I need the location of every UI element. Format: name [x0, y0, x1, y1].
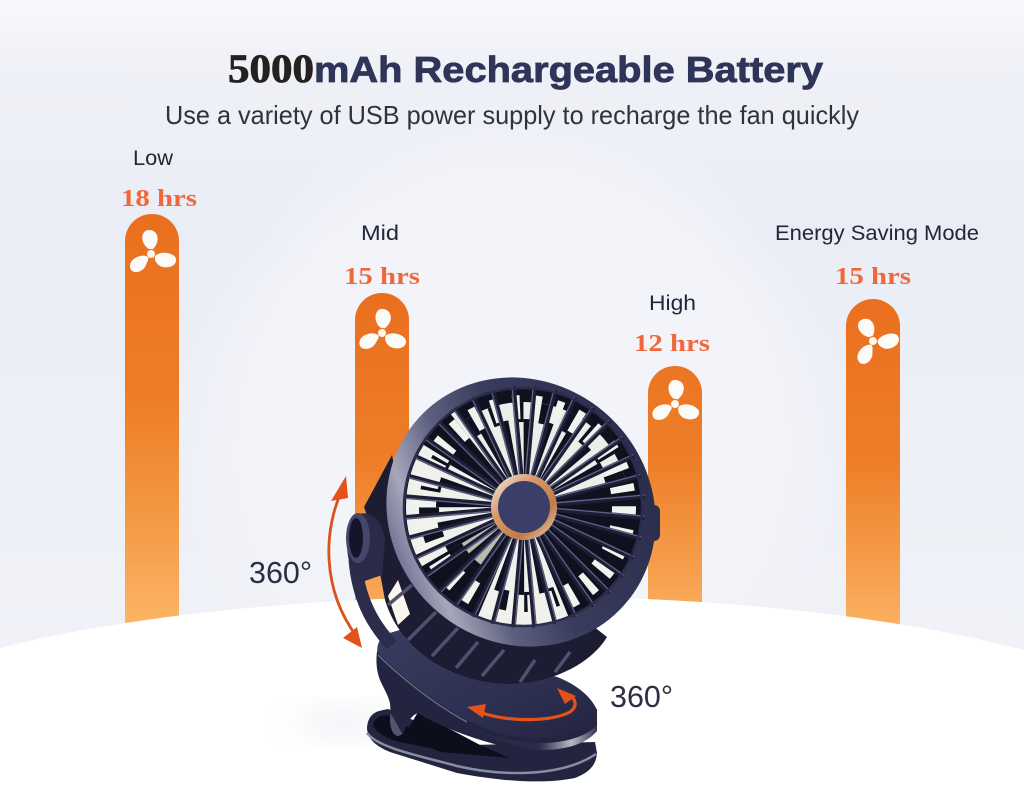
right pivot — [648, 505, 660, 541]
rear vents: white gap — [388, 580, 410, 625]
radial spokes — [403, 386, 645, 628]
title: 5000mAh Rechargeable Battery — [228, 46, 823, 91]
bar: Mid 15 hrs — [344, 222, 420, 620]
product: clip fan — [295, 322, 711, 781]
clip lower jaw — [367, 709, 597, 781]
side bracket and knob — [346, 513, 392, 645]
value: 12 hrs: 12 hrs — [634, 331, 710, 357]
rear vents: ribs — [388, 585, 570, 682]
shadow — [295, 708, 395, 736]
value: 18 hrs: 18 hrs — [121, 186, 197, 212]
grey blade — [472, 455, 576, 559]
rear shell — [364, 455, 607, 684]
bar: Low 18 hrs — [121, 147, 197, 630]
subtitle: Use a variety of USB power supply to recharge the fan quickly — [165, 100, 859, 130]
label: Mid: Mid — [361, 222, 399, 245]
outer ring — [331, 322, 711, 702]
icon: fan — [652, 377, 703, 425]
label: Energy Saving Mode: Energy Saving Mode — [775, 222, 979, 245]
hub — [491, 474, 557, 540]
rotation arrow: tilt — [329, 476, 362, 648]
icon: fan — [359, 306, 410, 354]
bar body — [355, 293, 409, 620]
icon: fan — [844, 309, 903, 366]
dark interior — [404, 388, 642, 626]
value: 15 hrs: 15 hrs — [835, 264, 911, 290]
bar body — [125, 214, 179, 630]
rotation arrow: base — [467, 688, 576, 720]
clip upper plate — [376, 630, 597, 753]
clip hinge — [390, 704, 510, 758]
fan blades — [449, 432, 599, 582]
bar: Energy Saving Mode 15 hrs — [775, 222, 979, 630]
white ground — [0, 596, 1024, 786]
value: 15 hrs: 15 hrs — [344, 264, 420, 290]
label: Low: Low — [133, 147, 174, 170]
bar body — [846, 299, 900, 630]
fan grille — [331, 322, 711, 702]
label: 360 base: 360° — [610, 679, 673, 714]
bar: High 12 hrs — [634, 292, 710, 620]
icon: fan — [130, 230, 176, 272]
bar body — [648, 366, 702, 620]
inner ring edge — [404, 388, 642, 626]
blade shadows — [412, 395, 636, 619]
label: 360 tilt: 360° — [249, 555, 312, 590]
label: High: High — [649, 292, 696, 315]
